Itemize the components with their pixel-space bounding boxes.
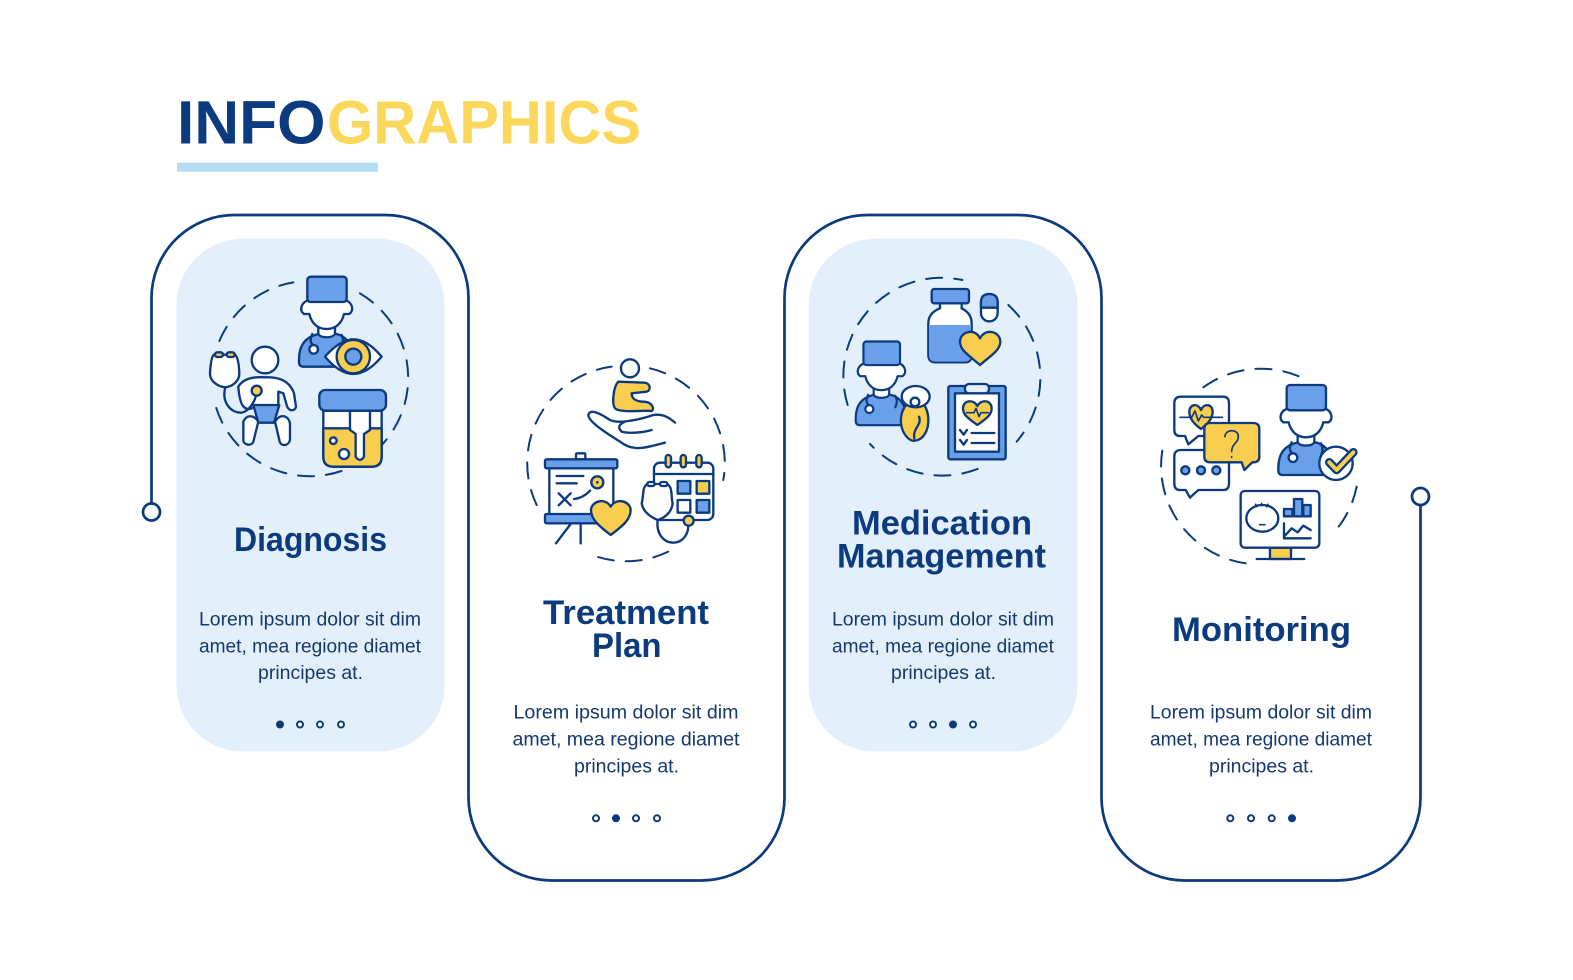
icon: diagnosis: [210, 277, 408, 476]
text block: Diagnosis: [199, 608, 422, 684]
step dots: 2 of 4: [593, 815, 660, 821]
text block: Medication Management: amet, mea regione diamet: [832, 635, 1055, 657]
icon: treatment plan: [527, 359, 725, 561]
heading: Medication Management: [837, 504, 1047, 576]
panel: Medication Management: [809, 239, 1078, 752]
heading: Medication Management: Medication: [852, 504, 1032, 542]
heading: Treatment Plan: Plan: [592, 627, 662, 665]
step dots: 1 of 4: [277, 722, 344, 728]
step dots: 4 of 4: [1227, 815, 1295, 821]
text block: Treatment Plan: amet, mea regione diamet: [512, 728, 740, 750]
text block: Diagnosis: amet, mea regione diamet: [199, 635, 422, 657]
heading: Treatment Plan: [543, 594, 710, 665]
text block: Treatment Plan: principes at.: [574, 756, 679, 778]
text block: Monitoring: principes at.: [1209, 756, 1314, 778]
icon: medication management: [843, 278, 1040, 476]
icon: monitoring: [1161, 369, 1357, 563]
text block: Medication Management: [832, 608, 1055, 684]
text block: Medication Management: principes at.: [891, 662, 996, 684]
text block: Diagnosis: Lorem ipsum dolor sit dim: [199, 608, 421, 630]
heading: Monitoring: Monitoring: [1172, 611, 1351, 649]
text block: Medication Management: Lorem ipsum dolor sit dim: [832, 608, 1054, 630]
panel: Treatment Plan: [512, 359, 740, 821]
panel: Diagnosis: [177, 239, 445, 752]
heading: Treatment Plan: Treatment: [543, 594, 710, 632]
text block: Monitoring: amet, mea regione diamet: [1150, 728, 1373, 750]
step dots: 3 of 4: [910, 722, 976, 728]
outline: connecting timeline border: [143, 215, 1429, 880]
panel: Monitoring: [1150, 369, 1373, 821]
text block: Monitoring: [1150, 702, 1373, 778]
text block: Treatment Plan: [512, 702, 740, 778]
heading: Diagnosis: Diagnosis: [234, 521, 387, 559]
text block: Monitoring: Lorem ipsum dolor sit dim: [1150, 702, 1372, 724]
title: INFO: [177, 88, 326, 158]
text block: Diagnosis: principes at.: [258, 662, 363, 684]
title: GRAPHICS: [327, 88, 641, 158]
heading: Medication Management: Management: [837, 538, 1047, 576]
text block: Treatment Plan: Lorem ipsum dolor sit dim: [514, 702, 738, 724]
title: [177, 88, 641, 172]
